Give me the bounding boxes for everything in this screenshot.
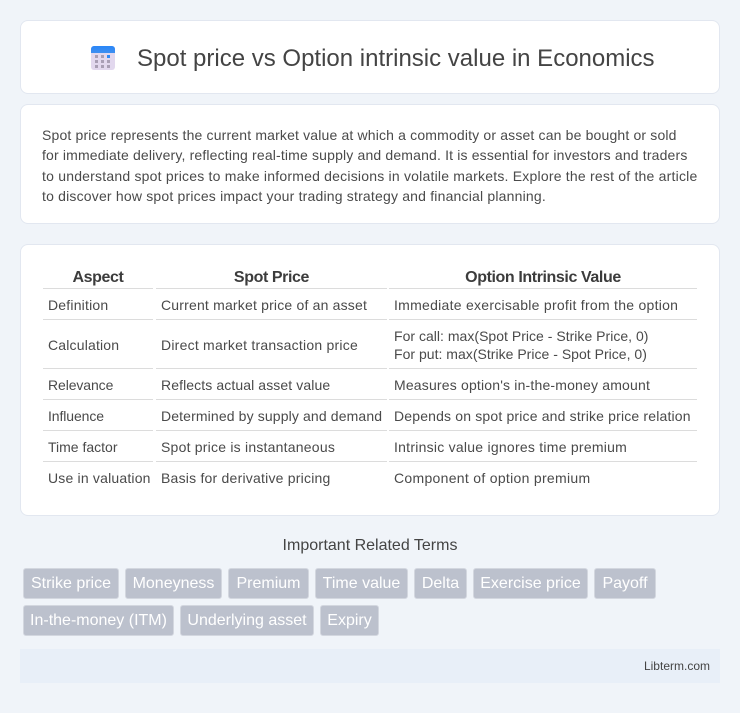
tag [414, 568, 467, 599]
comparison table [43, 269, 697, 486]
tag: Strike price [31, 575, 111, 592]
row: definition: Immediate exercisable profit from the option [394, 297, 678, 313]
row: calculation: Calculation [48, 337, 119, 353]
tag: Time value [323, 575, 400, 592]
tag: Premium [236, 575, 300, 592]
tag: Payoff [602, 575, 648, 592]
row: definition [43, 297, 697, 320]
title: Spot price vs Option intrinsic value in Economics [137, 45, 655, 72]
tag: Delta [422, 575, 459, 592]
row: use in valuation: Use in valuation [48, 470, 151, 486]
tag: In-the-money (ITM) [30, 612, 167, 629]
row: relevance [43, 377, 697, 400]
intro paragraph: to discover how spot prices impact your trading strategy and financial planning. [42, 188, 546, 204]
icon: calendar [91, 46, 115, 70]
row: calculation: Direct market transaction price [161, 337, 358, 353]
panel: intro text card [20, 104, 720, 224]
row: calculation: For put: max(Strike Price - Spot Price, 0) [394, 346, 647, 362]
related terms heading: Important Related Terms [283, 537, 457, 554]
intro paragraph: Spot price represents the current market value at which a commodity or asset can be bought or sold [42, 127, 677, 143]
row: calculation: For call: max(Spot Price - Strike Price, 0) [394, 328, 648, 344]
row: relevance: Measures option's in-the-money amount [394, 377, 650, 393]
intro paragraph: for immediate delivery, reflecting real-time supply and demand. It is essential for investors and traders [42, 147, 687, 163]
tag [320, 605, 379, 636]
tag [23, 605, 174, 636]
row: relevance: Reflects actual asset value [161, 377, 330, 393]
tag [180, 605, 314, 636]
row: calculation [43, 328, 697, 369]
row: use in valuation [48, 470, 590, 486]
row: definition: Definition [48, 297, 108, 313]
row: use in valuation: Basis for derivative pricing [161, 470, 331, 486]
row: use in valuation: Component of option premium [394, 470, 590, 486]
tag [594, 568, 656, 599]
row: influence: Influence [48, 408, 104, 424]
panel: comparison table card [20, 244, 720, 516]
row: definition: Current market price of an asset [161, 297, 367, 313]
panel: header card [20, 20, 720, 94]
tag [23, 568, 119, 599]
row: influence: Determined by supply and demand [161, 408, 382, 424]
table header row: Option Intrinsic Value [465, 269, 621, 286]
row: influence: Depends on spot price and strike price relation [394, 408, 691, 424]
footer credit: Libterm.com [644, 659, 710, 673]
tag: Underlying asset [187, 612, 307, 629]
intro paragraph [42, 127, 697, 204]
tag: Exercise price [480, 575, 581, 592]
footer bar [20, 649, 720, 683]
tag [228, 568, 309, 599]
table header row [43, 269, 697, 289]
table header row: Spot Price [234, 269, 309, 286]
row: influence [43, 408, 697, 431]
tag: Expiry [327, 612, 372, 629]
row: time factor: Spot price is instantaneous [161, 439, 335, 455]
tag: Moneyness [133, 575, 214, 592]
tag [315, 568, 408, 599]
tag [473, 568, 588, 599]
table header row: Aspect [73, 269, 123, 286]
row: time factor [43, 439, 697, 462]
tag [125, 568, 222, 599]
row: time factor: Time factor [48, 439, 118, 455]
row: relevance: Relevance [48, 377, 113, 393]
related terms tags [23, 568, 656, 636]
intro paragraph: to understand spot prices to make informed decisions in volatile markets. Explore the rest of the article [42, 168, 697, 184]
row: time factor: Intrinsic value ignores time premium [394, 439, 627, 455]
